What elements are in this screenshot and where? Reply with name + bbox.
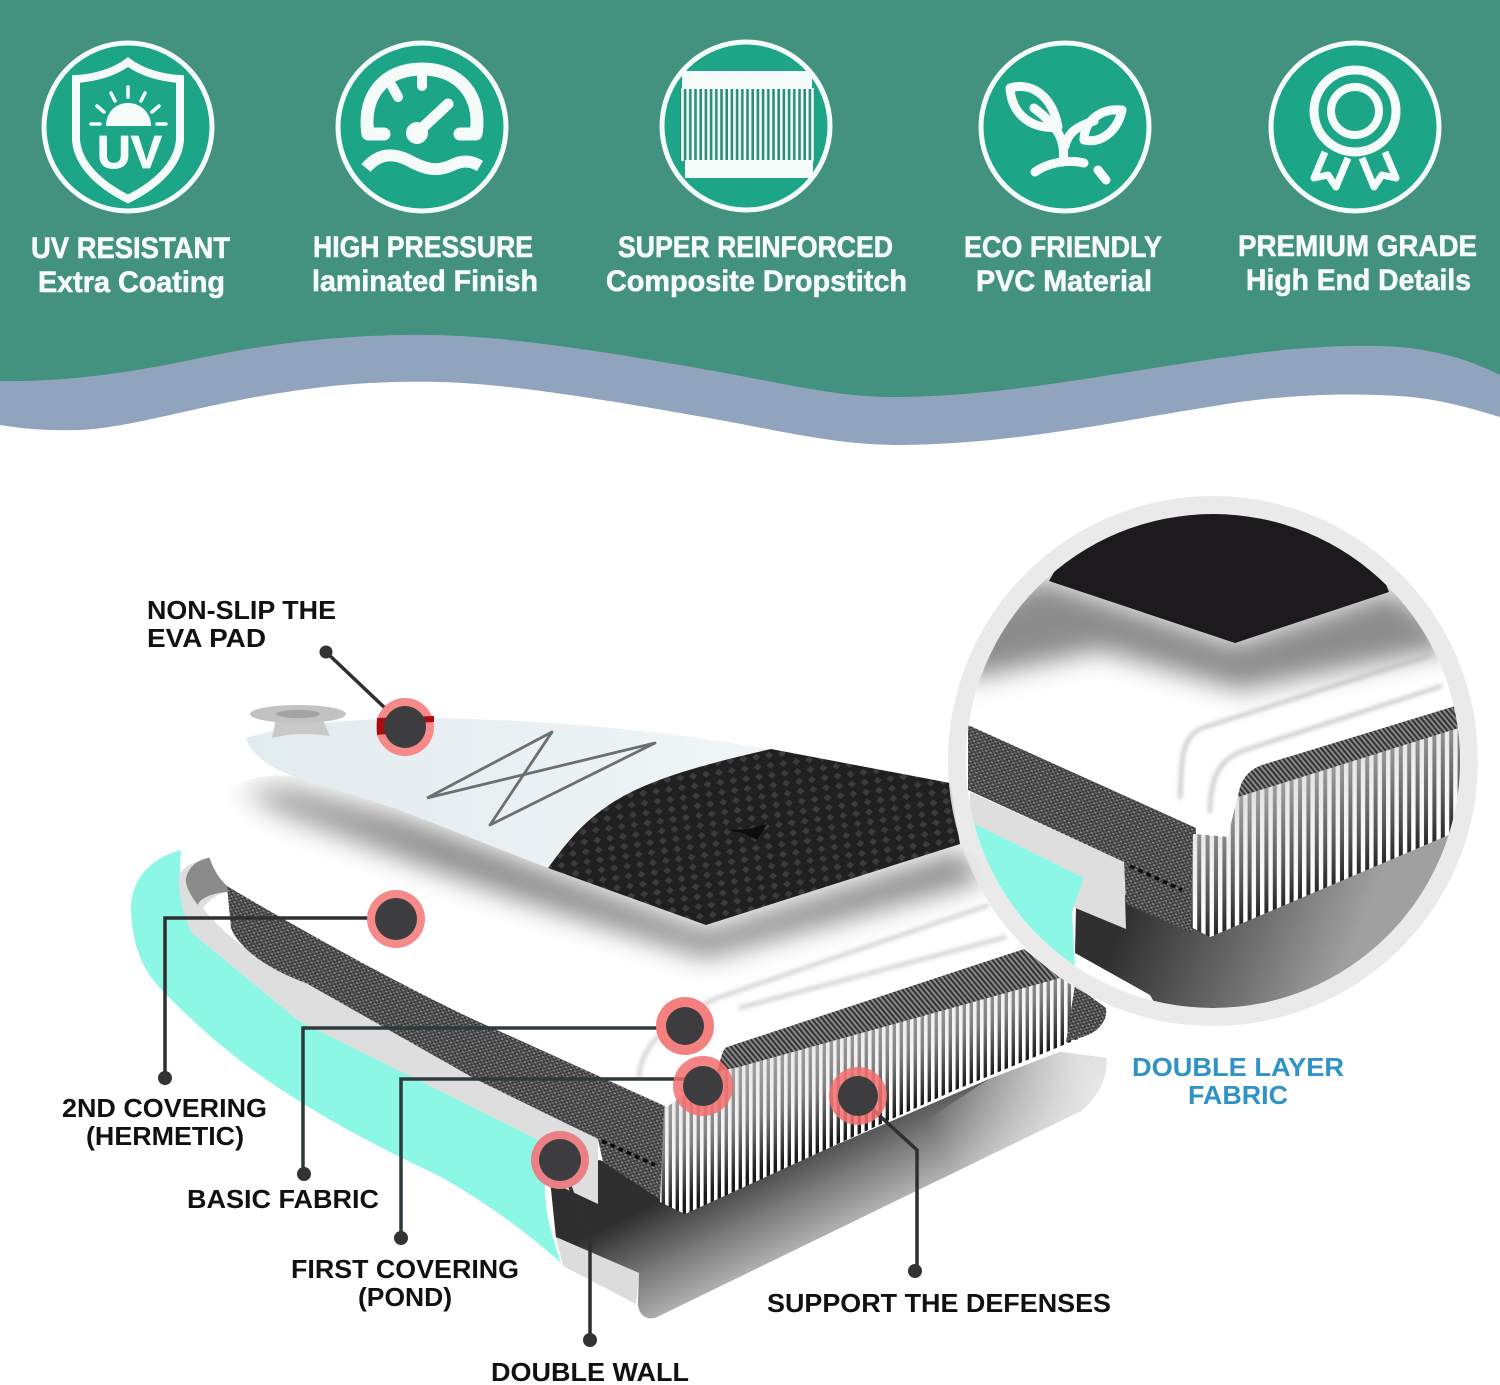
text: UV resistant: UV RESISTANT: [31, 232, 230, 265]
text: UV resistant: [31, 232, 230, 299]
text: UV resistant: Extra Coating: [38, 266, 225, 299]
label: support the defenses: SUPPORT THE DEFENSES: [767, 1288, 1111, 1318]
text: eco friendly: ECO FRIENDLY: [964, 231, 1162, 264]
icon: UV shield: UV: [97, 126, 162, 178]
lens ring: [957, 505, 1469, 1017]
board cross-section illustration: [131, 705, 1106, 1318]
label: 2nd covering: [62, 1093, 267, 1151]
sheet highlight: [850, 1052, 1106, 1190]
magnifier lens: [957, 490, 1475, 1030]
dropstitch stripes: [660, 953, 1106, 1214]
marker: first covering: [394, 1056, 733, 1245]
text: premium grade: High End Details: [1246, 264, 1471, 297]
label: non-slip: NON-SLIP THE: [147, 595, 336, 625]
header banner: [0, 0, 1500, 445]
label: first covering: FIRST COVERING: [291, 1254, 519, 1284]
label: double layer fabric: [1132, 1052, 1344, 1110]
text: eco friendly: PVC Material: [976, 265, 1152, 298]
woven fabric band: [227, 886, 666, 1202]
top deck: [246, 718, 772, 868]
marker: non-slip EVA pad: [320, 646, 434, 756]
light inner band: [179, 858, 598, 1204]
paddle mount: [250, 705, 346, 738]
label: 2nd covering: (HERMETIC): [86, 1121, 244, 1151]
flap end: [430, 1057, 598, 1204]
stripes fade: [660, 953, 1106, 1214]
woven corner: [1066, 985, 1106, 1042]
black traction pad: [548, 749, 960, 925]
hatched band: [717, 949, 1060, 1071]
icon: premium rosette: [1271, 43, 1439, 211]
mint outer layer: [131, 850, 561, 1263]
lens content: [968, 514, 1460, 1008]
label: first covering: (POND): [358, 1282, 452, 1312]
text: premium grade: [1238, 230, 1477, 297]
icon: pressure gauge: [338, 43, 506, 211]
label: double layer fabric: FABRIC: [1188, 1080, 1288, 1110]
label: non-slip: EVA PAD: [147, 623, 266, 653]
label: first covering: [291, 1254, 519, 1312]
white gap behind band: [203, 892, 262, 960]
icon: UV shield: [44, 43, 212, 211]
text: eco friendly: [964, 231, 1162, 298]
label: basic fabric: BASIC FABRIC: [187, 1184, 379, 1214]
lower light strip: [556, 1237, 639, 1304]
marker: basic fabric: [297, 997, 714, 1181]
marker: support the defenses: [829, 1067, 922, 1278]
label: double layer fabric: DOUBLE LAYER: [1132, 1052, 1344, 1082]
text: premium grade: PREMIUM GRADE: [1238, 230, 1477, 263]
text: super reinforced: Composite Dropstitch: [606, 265, 907, 298]
grey crescent: [186, 857, 228, 905]
stitch dashes: [602, 1141, 655, 1165]
icon: dropstitch block: [662, 42, 830, 210]
icon: eco sprout: [981, 43, 1149, 211]
lower sheet: [549, 1052, 1106, 1318]
bungee cords: [427, 732, 655, 825]
white board body: [206, 776, 1100, 1107]
text: high pressure: laminated Finish: [312, 265, 538, 298]
text: super reinforced: [606, 231, 907, 298]
label: non-slip: [147, 595, 336, 653]
board shading: [240, 785, 1006, 1078]
marker: double wall: [531, 1131, 597, 1347]
text: super reinforced: SUPER REINFORCED: [618, 231, 893, 264]
marker: 2nd covering: [158, 890, 425, 1085]
text: high pressure: HIGH PRESSURE: [313, 231, 533, 264]
text: high pressure: [312, 231, 538, 298]
pad tab: [727, 824, 767, 840]
label: 2nd covering: 2ND COVERING: [62, 1093, 267, 1123]
